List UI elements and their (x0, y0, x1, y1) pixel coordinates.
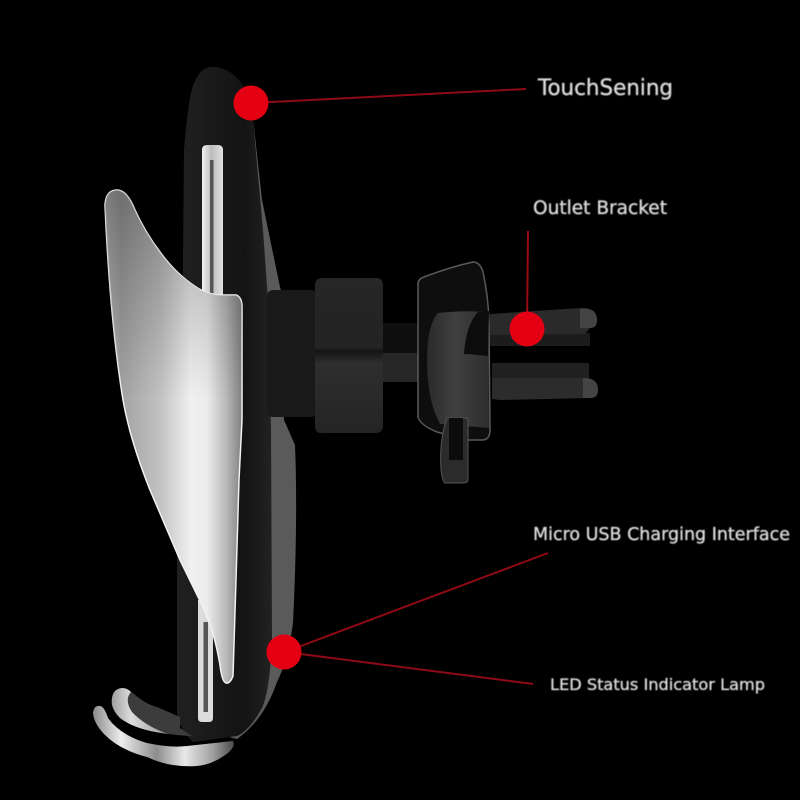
clip head (418, 262, 490, 483)
holder back body (177, 67, 272, 742)
clip shell (418, 262, 490, 440)
upper slot bar (202, 145, 223, 296)
tab slot (449, 418, 463, 460)
clip tab (441, 418, 468, 483)
lower slot bar (198, 600, 213, 722)
callout: Outlet Bracket: Outlet Bracket (533, 198, 667, 219)
clip disc (427, 311, 489, 428)
callout: Outlet Bracket (510, 198, 667, 346)
callout: Micro USB Charging Interface (285, 525, 790, 652)
callout: LED Status Indicator Lamp: LED Status Indicator Lamp (550, 675, 765, 694)
callout: LED Status Indicator Lamp (266, 634, 765, 694)
callout: Micro USB Charging Interface: Micro USB Charging Interface (533, 525, 790, 545)
wing top shading (105, 190, 242, 400)
callout: TouchSening: TouchSening (537, 76, 673, 101)
inner foot hook (112, 688, 192, 736)
phone holder device (93, 67, 598, 766)
outer silver foot (93, 706, 234, 766)
textured rear edge (225, 118, 296, 739)
upper vent prong (490, 308, 597, 346)
shaft (383, 323, 423, 382)
disc shadow (464, 311, 489, 356)
callout: TouchSening (234, 76, 673, 120)
silver wing arm (105, 190, 242, 683)
rotating knob (315, 278, 383, 433)
neck (267, 290, 317, 417)
lower vent prong (492, 363, 598, 400)
